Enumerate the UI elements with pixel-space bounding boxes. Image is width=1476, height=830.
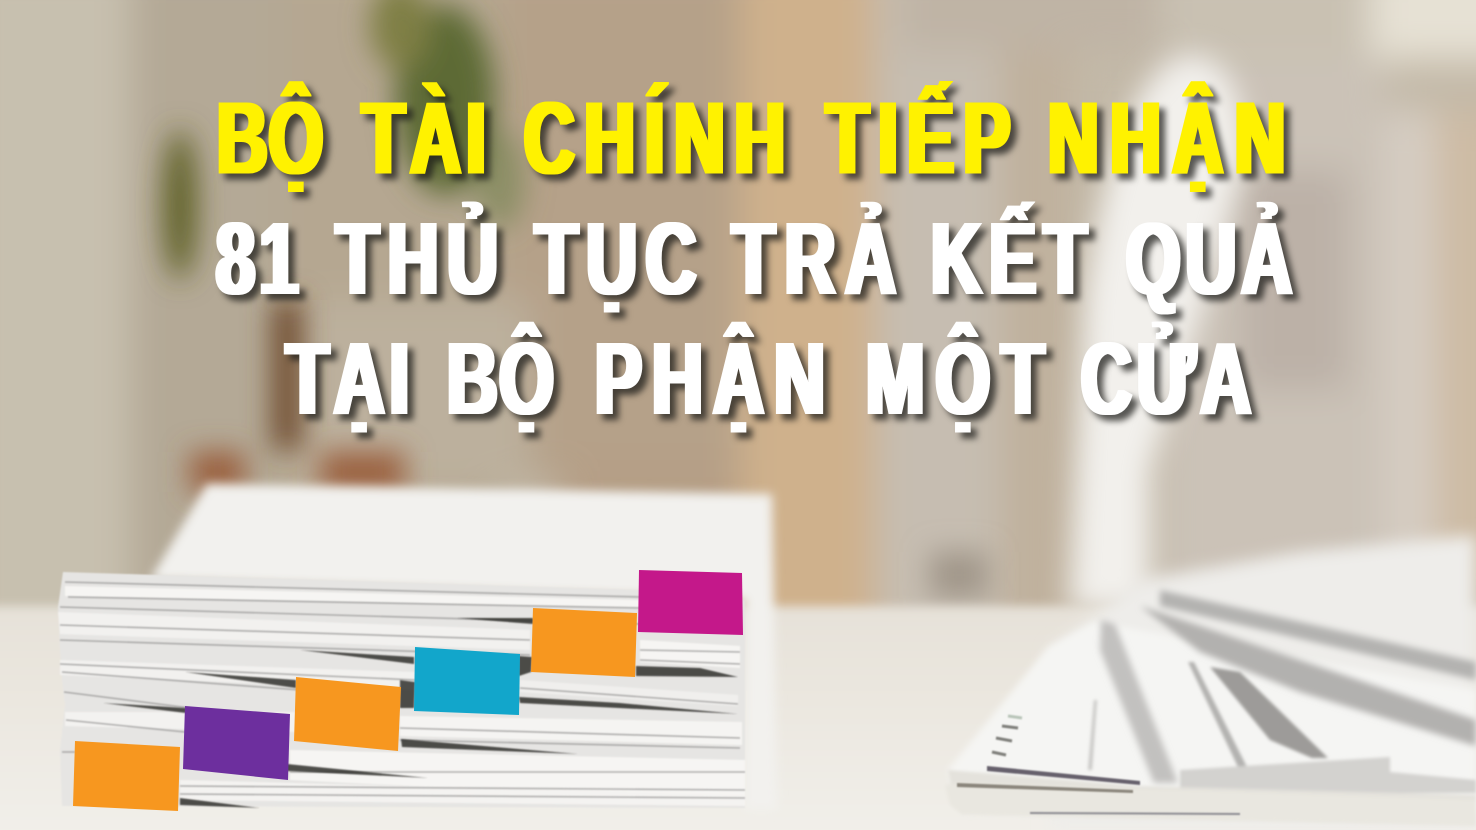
- title line 2: [216, 200, 1292, 316]
- title line 3: [286, 320, 1251, 436]
- top blurred sheet: [150, 484, 777, 810]
- front page: [948, 622, 1476, 815]
- tab cyan: [414, 647, 520, 715]
- desk surface: [0, 606, 1476, 830]
- title line 1: BỘ: [217, 80, 323, 196]
- title line 3: BỘ: [447, 320, 554, 436]
- title line 3: PHẬN: [595, 320, 825, 436]
- title line 3: CỬA: [1081, 320, 1251, 436]
- title line 1: CHÍNH: [524, 80, 785, 196]
- title line 1: TIẾP: [826, 80, 1010, 196]
- paper stack left: [58, 484, 777, 811]
- plant leaves: [163, 0, 525, 280]
- title line 1: TÀI: [362, 80, 486, 196]
- white lamp: [1070, 55, 1245, 610]
- title line 2: KẾT: [931, 200, 1087, 316]
- dark gaps between sheets: [103, 618, 738, 808]
- tab orange 2: [294, 677, 401, 751]
- title: [216, 80, 1292, 436]
- light page bands: [65, 586, 640, 608]
- back sheet: [1050, 535, 1476, 830]
- title line 1: [217, 80, 1285, 196]
- tab orange 3: [73, 741, 180, 811]
- title line 2: TRẢ: [732, 200, 896, 316]
- paper stack right: [945, 535, 1476, 830]
- spiral binding: [992, 716, 1022, 755]
- page edge lines: [60, 582, 745, 798]
- title line 2: TỤC: [535, 200, 696, 316]
- tab magenta: [638, 570, 743, 635]
- tab orange 1: [531, 608, 637, 677]
- tab purple: [183, 706, 290, 780]
- title line 3: MỘT: [866, 320, 1044, 436]
- title line 2: QUẢ: [1126, 200, 1292, 316]
- plant trunk and pot: [190, 300, 405, 492]
- blurred dark object: [930, 552, 988, 598]
- title line 2: THỦ: [336, 200, 498, 316]
- title line 3: TẠI: [286, 320, 409, 436]
- title line 2: 81: [216, 200, 298, 316]
- title line 1: NHẬN: [1048, 80, 1285, 196]
- sheet layers: [58, 572, 745, 808]
